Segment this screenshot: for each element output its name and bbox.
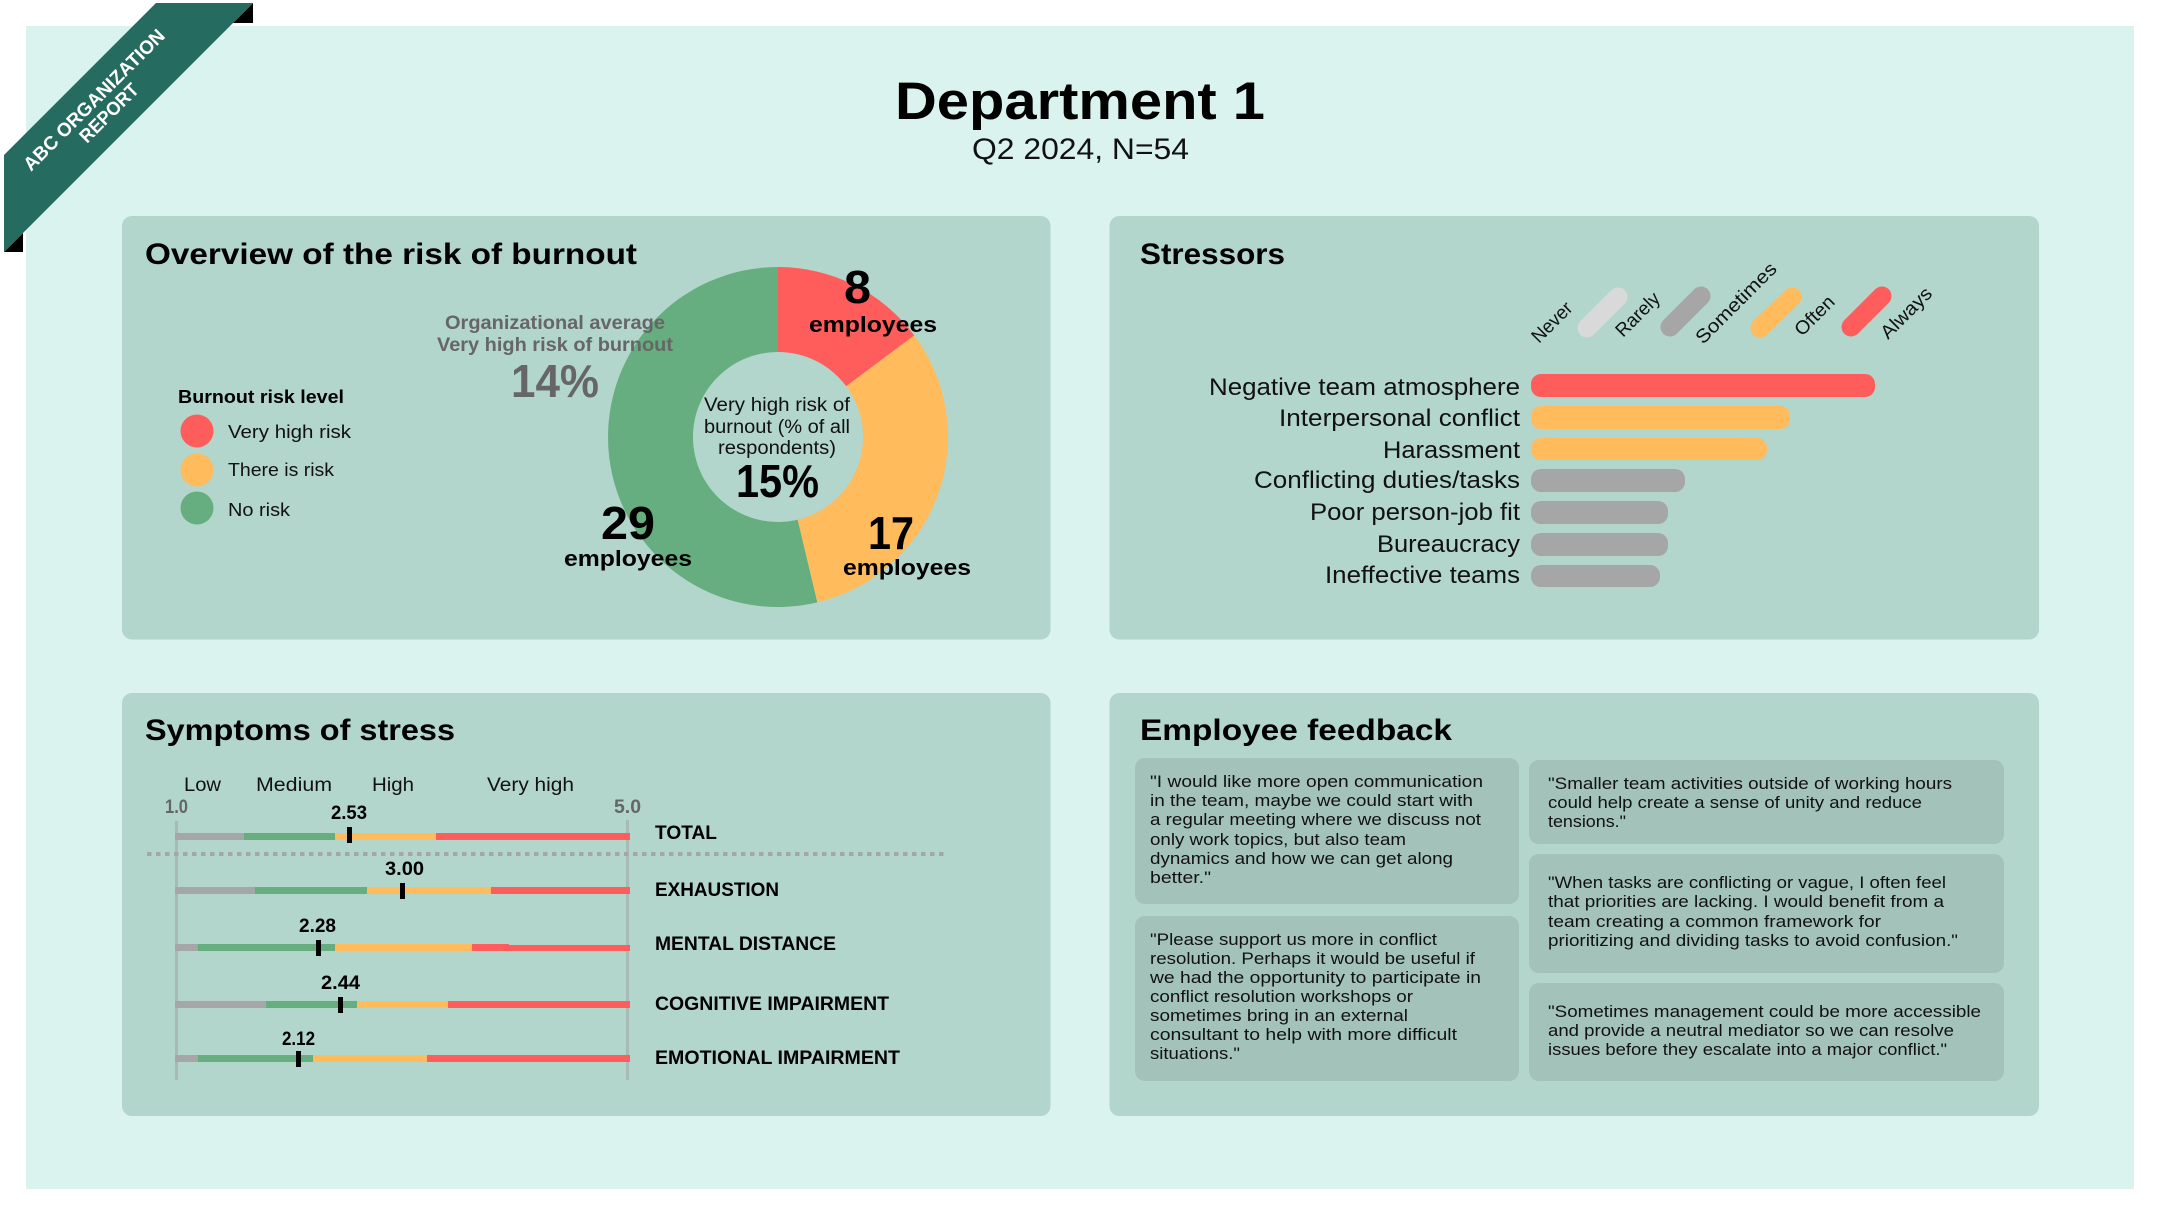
label: 8 employees: [809, 261, 937, 337]
quote card: open communication: [1135, 758, 1519, 904]
frequency legend: Never: [1528, 298, 1578, 348]
row: exhaustion: EXHAUSTION: [655, 880, 779, 901]
subtitle: Q2 2024, N=54: [972, 133, 1189, 166]
frequency legend: Sometimes: [1692, 259, 1781, 349]
scale labels: 1.0: [165, 797, 188, 818]
heading: overview: Overview of the risk of burnout: [145, 238, 637, 271]
callout: organizational average: Organizational average: [445, 313, 665, 334]
row: exhaustion: 3.00: [385, 859, 424, 880]
row: emotional impairment: EMOTIONAL IMPAIRMENT: [655, 1048, 900, 1069]
row: cognitive impairment: COGNITIVE IMPAIRMENT: [655, 994, 889, 1015]
quote card: team activities: "Smaller team activities outside of working hours: [1548, 774, 1952, 793]
callout: organizational average: 14%: [511, 355, 599, 407]
frequency legend: Often: [1791, 292, 1839, 341]
row: cognitive impairment: 2.44: [321, 973, 360, 994]
quote card: open communication: dynamics and how we can get along: [1150, 849, 1453, 868]
scale labels: Very high: [487, 775, 574, 796]
legend: burnout risk level: No risk: [228, 500, 291, 520]
frequency legend: Rarely: [1612, 288, 1665, 342]
heading: feedback: Employee feedback: [1140, 714, 1452, 747]
corner ribbon: [4, 3, 253, 252]
panel: symptoms of stress: [122, 693, 1050, 1116]
quote card: conflict resolution: sometimes bring in an external: [1150, 1006, 1408, 1025]
bar chart: stressors: Poor person-job fit: [1310, 499, 1520, 526]
panel: overview of the risk of burnout: [122, 216, 1050, 640]
row: mental distance: MENTAL DISTANCE: [655, 934, 836, 955]
quote card: team activities: [1529, 760, 2004, 844]
scale labels: 5.0: [614, 797, 641, 818]
heading: stressors: Stressors: [1140, 238, 1285, 271]
quote card: conflict resolution: consultant to help with more difficult: [1150, 1025, 1457, 1044]
row: emotional impairment: 2.12: [282, 1029, 315, 1050]
quote card: open communication: better.": [1150, 868, 1211, 887]
row: total: TOTAL: [655, 823, 717, 844]
legend: burnout risk level: Very high risk: [228, 422, 352, 442]
scale labels: Low: [184, 775, 221, 796]
legend: burnout risk level: [178, 387, 352, 524]
quote card: team activities: tensions.": [1548, 812, 1626, 831]
quote card: conflict resolution: resolution. Perhaps it would be useful if: [1150, 949, 1475, 968]
panel: stressors: [1110, 216, 2039, 640]
label: 8 employees: 8: [844, 261, 871, 313]
callout: organizational average: Very high risk of burnout: [437, 335, 674, 356]
scale labels: Medium: [256, 775, 332, 796]
bar chart: stressors: Interpersonal conflict: [1279, 405, 1520, 432]
quote card: conflict resolution: situations.": [1150, 1044, 1240, 1063]
quote card: conflicting tasks: that priorities are lacking. I would benefit from a: [1548, 892, 1945, 911]
bar chart: stressors: Negative team atmosphere: [1209, 374, 1520, 401]
label: 17 employees: employees: [843, 555, 971, 580]
heading: symptoms: Symptoms of stress: [145, 714, 455, 747]
quote card: management: issues before they escalate into a major conflict.": [1548, 1040, 1947, 1059]
panel: employee feedback: [1110, 693, 2039, 1116]
label: 17 employees: [843, 507, 971, 580]
bar chart: stressors: Ineffective teams: [1325, 562, 1520, 589]
frequency legend: [1528, 259, 1937, 349]
label: 8 employees: employees: [809, 312, 937, 337]
quote card: conflicting tasks: [1529, 854, 2004, 973]
quote card: open communication: in the team, maybe we could start with: [1150, 791, 1473, 810]
quote card: open communication: only work topics, but also team: [1150, 830, 1406, 849]
bar chart: stressors: Conflicting duties/tasks: [1254, 467, 1520, 494]
row: cognitive impairment: [175, 973, 889, 1015]
donut centre label: burnout (% of all: [704, 417, 850, 438]
donut centre label: Very high risk of: [704, 395, 851, 416]
row: exhaustion: [175, 859, 779, 901]
bar chart: stressors: Bureaucracy: [1377, 531, 1520, 558]
axes: [175, 820, 629, 1080]
quote card: management: and provide a neutral mediator so we can resolve: [1548, 1021, 1954, 1040]
donut chart: [608, 267, 948, 607]
quote card: team activities: could help create a sense of unity and reduce: [1548, 793, 1922, 812]
label: 29 employees: [564, 497, 692, 571]
quote card: conflict resolution: [1135, 916, 1519, 1081]
quote card: management: [1529, 983, 2004, 1081]
row: mental distance: [175, 916, 836, 956]
bar chart: stressors: [1209, 374, 1875, 589]
scale labels: High: [372, 775, 414, 796]
quote card: conflicting tasks: prioritizing and dividing tasks to avoid confusion.": [1548, 931, 1958, 950]
quote card: conflict resolution: "Please support us more in conflict: [1150, 930, 1437, 949]
quote card: conflicting tasks: team creating a common framework for: [1548, 912, 1881, 931]
row: mental distance: 2.28: [299, 916, 336, 937]
row: total: 2.53: [331, 803, 367, 824]
label: 29 employees: employees: [564, 546, 692, 571]
scale labels: [165, 775, 641, 818]
donut centre label: 15%: [736, 455, 819, 507]
quote card: management: "Sometimes management could be more accessible: [1548, 1002, 1981, 1021]
donut centre label: [704, 395, 851, 507]
title: Department 1: [895, 72, 1265, 131]
quote card: conflict resolution: we had the opportunity to participate in: [1149, 968, 1481, 987]
row: emotional impairment: [175, 1029, 900, 1069]
corner ribbon: ABC ORGANIZATION: [20, 26, 170, 176]
frequency legend: Always: [1877, 283, 1937, 344]
legend: burnout risk level: There is risk: [228, 460, 335, 480]
quote card: open communication: "I would like more open communication: [1150, 772, 1483, 791]
label: 17 employees: 17: [868, 507, 914, 559]
quote card: conflict resolution: conflict resolution workshops or: [1150, 987, 1413, 1006]
bar chart: stressors: Harassment: [1383, 437, 1520, 464]
quote card: open communication: a regular meeting where we discuss not: [1150, 810, 1481, 829]
callout: organizational average: [437, 313, 674, 407]
label: 29 employees: 29: [601, 497, 655, 549]
row: total: [175, 803, 717, 844]
legend: burnout risk level: Burnout risk level: [178, 387, 344, 407]
quote card: conflicting tasks: "When tasks are conflicting or vague, I often feel: [1548, 873, 1946, 892]
corner ribbon: REPORT: [76, 79, 144, 148]
donut centre label: respondents): [718, 438, 836, 459]
